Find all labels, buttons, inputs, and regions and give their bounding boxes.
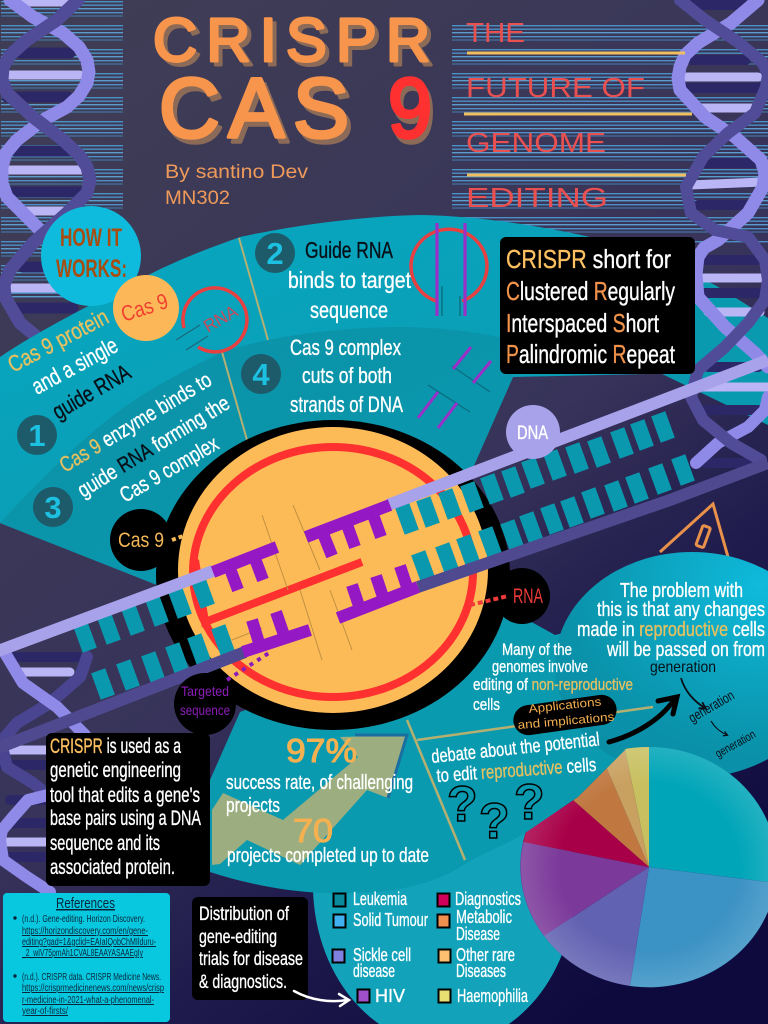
callout: CRISPR description: genetic engineering — [50, 759, 181, 782]
label: applications and implications pill: Applications — [528, 694, 602, 716]
text: problem with reproductive cells — [577, 580, 765, 661]
text: problem with reproductive cells: made in reproductive cells — [577, 619, 765, 641]
icon: question marks — [447, 774, 545, 849]
icon: how it works circle — [41, 206, 141, 306]
callout: distribution: & diagnostics. — [199, 972, 287, 993]
legend: disease — [353, 961, 395, 981]
subtitle: author: MN302 — [165, 188, 230, 209]
callout: CRISPR description: CRISPR is used as a — [50, 735, 181, 758]
icon: how it works circle: HOW IT — [60, 224, 122, 252]
subtitle: author: By santino Dev — [165, 162, 309, 183]
legend — [332, 889, 529, 1006]
callout: CRISPR acronym: CRISPR short for — [506, 244, 671, 274]
step 3 number: 3 — [44, 490, 62, 525]
legend: Sickle cell — [353, 945, 411, 965]
heading: the future of genome editing: THE — [466, 17, 525, 48]
panel: references: year-of-firsts/ — [22, 1006, 68, 1017]
step 4 text: cuts of both — [302, 363, 392, 388]
stripes: top right — [452, 17, 768, 243]
callout: CRISPR acronym — [500, 237, 695, 374]
black ring — [156, 420, 510, 730]
step 2 text — [288, 237, 412, 323]
stat: 97%: projects — [226, 795, 280, 817]
text: non-reproductive cells — [473, 640, 633, 714]
DNA backbone strands — [0, 360, 768, 748]
text: debate: debate about the potential — [430, 729, 601, 768]
step 1 text: guide RNA — [48, 359, 135, 424]
step 1 text: Cas 9 protein — [3, 303, 113, 377]
panel: fan right extension behind helix — [660, 268, 768, 425]
text: generation cascade: generation — [713, 727, 758, 761]
legend: Other rare — [456, 945, 515, 965]
legend: Diseases — [456, 961, 506, 981]
callout: distribution: Distribution of — [199, 904, 290, 925]
callout: CRISPR description — [46, 733, 210, 886]
diagram: Cas 9 complex on DNA — [0, 360, 768, 748]
title: CRISPR — [153, 6, 430, 74]
step 3 number — [33, 487, 73, 527]
stripes: top left — [1, 0, 123, 300]
callout: CRISPR description: sequence and its — [50, 832, 160, 855]
panel: references: References — [56, 895, 115, 912]
icon: question marks: ? — [479, 793, 510, 849]
callout: CRISPR acronym: Clustered Regularly — [506, 276, 675, 306]
legend: Metabolic — [456, 907, 512, 927]
label: Cas 9 — [110, 509, 186, 571]
divider lines — [222, 238, 268, 440]
stat: 97%: 97% — [286, 732, 357, 769]
heading: the future of genome editing: EDITING — [466, 182, 608, 213]
panel: references: https://crisprmedicinenews.com/news/crisp — [22, 983, 164, 994]
heading: the future of genome editing: FUTURE OF — [466, 72, 645, 103]
step 2 text: binds to target — [288, 267, 412, 293]
label: DNA — [506, 405, 560, 459]
step 3 text: Cas 9 complex — [116, 431, 223, 507]
panel: references: (n.d.). CRISPR data. CRISPR Medicine News. — [22, 972, 161, 983]
red ring — [193, 447, 473, 697]
callout: distribution — [192, 897, 308, 1000]
callout: distribution: gene-editing — [199, 927, 277, 948]
step 2 number: 2 — [266, 236, 284, 271]
pie chart — [520, 747, 768, 987]
panel: references: editing?gad=1&gclid=EAIaIQobChMIlduru- — [22, 937, 156, 948]
icon: RNA ring: RNA — [200, 301, 241, 336]
callout: CRISPR description: base pairs using a DNA — [50, 807, 201, 830]
panel: applications fan — [210, 600, 720, 893]
step 1 number: 1 — [28, 418, 46, 453]
step 4 number: 4 — [252, 357, 270, 392]
orange circle — [178, 427, 488, 713]
stat: 70: projects completed up to date — [227, 845, 429, 867]
step 1 text: and a single — [27, 332, 122, 399]
text: debate — [430, 729, 601, 787]
icon: question marks: ? — [447, 776, 478, 832]
step 2 text: sequence — [310, 297, 388, 323]
panel: steps 3 and 4 band — [0, 327, 513, 585]
legend: Haemophilia — [457, 986, 529, 1006]
icon: warning triangle — [660, 504, 730, 564]
text: debate: to edit reproductive cells — [436, 755, 597, 787]
purple target bases — [213, 505, 418, 652]
label: targeted sequence: Targeted — [181, 683, 229, 699]
text: non-reproductive cells: genomes involve — [492, 657, 588, 676]
step 1 number — [17, 415, 57, 455]
cut marks — [232, 505, 352, 660]
DNA helix: top left — [2, 0, 90, 337]
text: generation cascade — [650, 659, 758, 761]
step 4 text: Cas 9 complex — [290, 335, 401, 360]
panel: references: (n.d.). Gene-editing. Horizon Discovery. — [22, 914, 145, 925]
panel: references: _2_wIV75pmAh1CVAL8EAAYASAAEgIy — [21, 948, 143, 959]
icon: cut DNA strands — [418, 347, 491, 428]
legend: Solid Tumour — [353, 910, 428, 930]
label: DNA: DNA — [517, 423, 548, 444]
arrow: distribution to legend — [294, 991, 349, 1006]
panel: legend circle — [313, 725, 575, 1024]
callout: CRISPR description: tool that edits a gene's — [50, 784, 200, 807]
step 4 text — [290, 335, 403, 417]
stat: 97%: success rate, of challenging — [226, 772, 413, 794]
callout: distribution: trials for disease — [199, 949, 303, 970]
text: non-reproductive cells: cells — [473, 695, 500, 714]
label: applications and implications pill: and implications — [517, 710, 615, 732]
arrow: to problem circle — [609, 697, 677, 742]
title: CAS — [163, 66, 353, 160]
legend: Diagnostics — [455, 889, 521, 909]
label: targeted sequence: sequence — [180, 702, 230, 718]
text: non-reproductive cells: editing of non-reproductive — [473, 675, 633, 694]
panel: how it works fan — [0, 215, 690, 585]
title: CRISPR — [157, 10, 434, 78]
label: RNA — [470, 568, 550, 624]
legend: Disease — [456, 924, 500, 944]
step 4 text: strands of DNA — [290, 392, 403, 417]
guide RNA strand — [195, 560, 362, 622]
step 1 text — [3, 303, 135, 424]
label: applications and implications pill — [511, 693, 619, 737]
text: generation cascade: generation — [686, 687, 737, 726]
heading: the future of genome editing: GENOME — [466, 127, 606, 158]
panel: references — [3, 893, 170, 1022]
teal base pairs — [73, 411, 695, 700]
callout: CRISPR acronym: Interspaced Short — [506, 308, 660, 338]
icon: cas 9 circle — [113, 275, 179, 341]
stat: 70: 70 — [293, 812, 333, 849]
text: generation cascade: generation — [650, 659, 716, 676]
callout: CRISPR description: associated protein. — [50, 856, 175, 879]
icon: question marks: ? — [514, 774, 545, 830]
step 2 number — [255, 233, 295, 273]
dividers: applications section — [407, 707, 653, 860]
title: CAS — [159, 61, 349, 155]
stat: 97% — [226, 732, 413, 817]
callout: CRISPR acronym: Palindromic Repeat — [506, 339, 676, 369]
panel: references: https://horizondiscovery.com/en/gene- — [22, 926, 148, 937]
label: RNA: RNA — [513, 585, 543, 608]
icon: cas 9 circle: Cas 9 — [118, 288, 171, 327]
heading: the future of genome editing — [464, 17, 692, 213]
DNA helix: top right — [678, 0, 768, 463]
step 3 text: guide RNA forming the — [73, 391, 234, 502]
subtitle: author — [165, 162, 309, 209]
icon: how it works circle: WORKS: — [56, 255, 127, 283]
stat: 70 — [227, 812, 429, 867]
label: Cas 9: Cas 9 — [118, 529, 164, 552]
icon: guide RNA binding — [411, 223, 487, 316]
legend: HIV — [375, 986, 405, 1006]
step 2 text: Guide RNA — [305, 237, 393, 263]
legend: Leukemia — [353, 889, 408, 909]
panel: references: r-medicine-in-2021-what-a-phenomenal- — [22, 995, 154, 1006]
icon: RNA ring — [176, 288, 247, 352]
text: non-reproductive cells: Many of the — [502, 640, 572, 659]
panel: problem circle — [555, 552, 768, 778]
DNA helix: lower left — [0, 653, 87, 892]
step 4 number — [241, 354, 281, 394]
title: 9 — [388, 61, 432, 155]
title — [153, 6, 435, 160]
icon: growth arrow — [212, 735, 407, 865]
label: targeted sequence — [174, 651, 272, 735]
title: 9 — [391, 66, 435, 160]
step 3 text: Cas 9 enzyme binds to — [55, 368, 216, 477]
